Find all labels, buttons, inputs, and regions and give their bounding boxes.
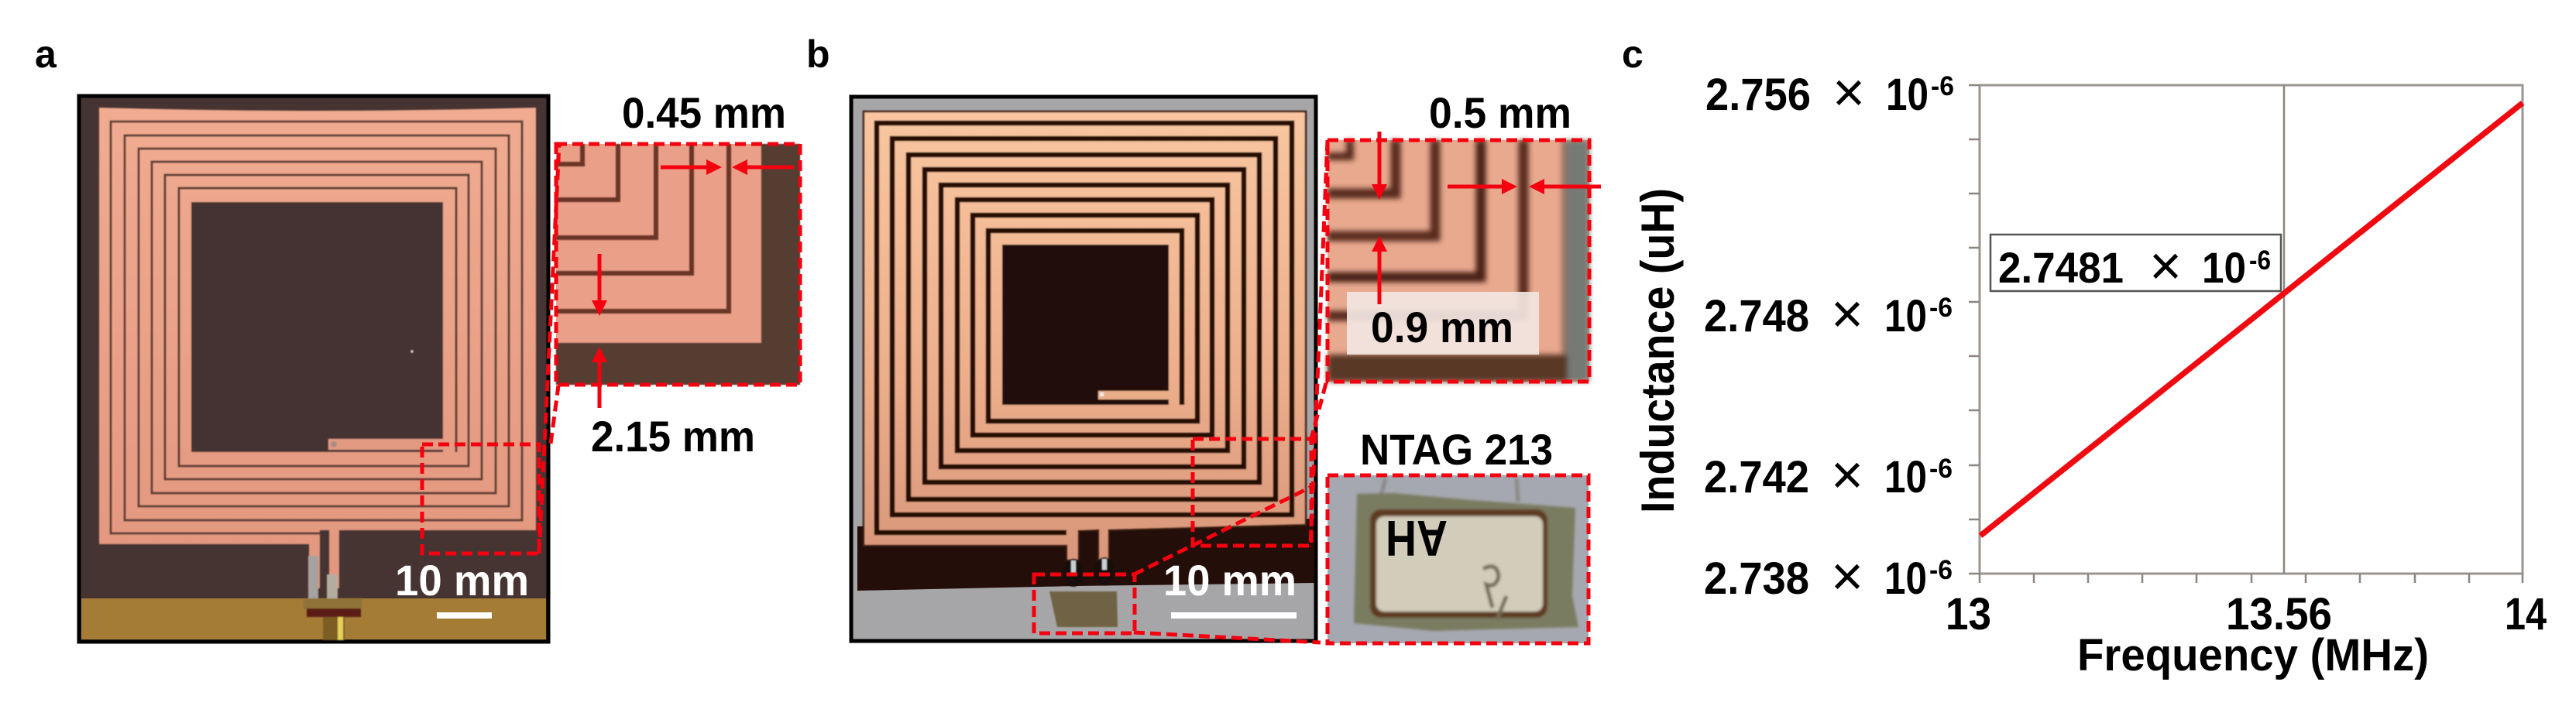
x tick labels: 13.56 [2226, 589, 2332, 639]
inset b: magnified coil corner [1327, 140, 1589, 382]
y tick label 2.742: -6 [1929, 454, 1953, 484]
y tick label 2.756: -6 [1931, 71, 1954, 101]
plot frame [1980, 85, 2523, 574]
panel label a: a [35, 33, 57, 76]
copper coil b [864, 111, 1306, 560]
dimension arrows a [592, 159, 794, 408]
x tick labels [1946, 589, 2547, 639]
y tick label 2.748: × [1831, 283, 1863, 345]
13.56 MHz marker [2283, 85, 2285, 574]
y tick label 2.738: -6 [1929, 555, 1953, 585]
axis ticks [1969, 85, 2523, 583]
inset b: NTAG 213 chip photo [1327, 475, 1589, 643]
y tick label 2.742: 2.742 [1704, 452, 1809, 502]
inductance curve [1980, 103, 2523, 536]
label 0.45 mm: 0.45 mm [622, 88, 786, 137]
zoom selection and connectors a [422, 144, 559, 553]
y tick label 2.756: 10 [1886, 70, 1929, 120]
NFC chip on coil [1049, 557, 1118, 627]
callout: value at 13.56 MHz [1990, 235, 2281, 297]
y tick label 2.742: × [1831, 444, 1863, 506]
y tick label 2.756: × [1832, 62, 1865, 124]
scale bar a: 10 mm [395, 556, 529, 605]
scale bar b: 10 mm [1163, 556, 1297, 605]
inset a: magnified coil corner [556, 144, 800, 385]
label 0.5 mm: 0.5 mm [1429, 88, 1571, 137]
panel b: photo of printed coil [851, 97, 1316, 641]
chart c: inductance vs frequency [1969, 85, 2523, 583]
y tick label 2.756 [1705, 62, 1954, 124]
label NTAG 213: NTAG 213 [1360, 425, 1553, 474]
y tick label 2.748 [1704, 283, 1953, 345]
label 2.15 mm: 2.15 mm [591, 412, 755, 461]
callout: value at 13.56 MHz: 10 [2202, 243, 2246, 292]
panel a: photo of coil antenna [79, 96, 548, 642]
wood base [81, 598, 546, 639]
dimension arrows b [1372, 132, 1601, 304]
x tick labels: 13 [1946, 589, 1991, 639]
y tick label 2.742 [1704, 444, 1953, 506]
panel label c: c [1622, 33, 1643, 76]
panel label b: b [806, 33, 830, 76]
copper coil a [99, 108, 536, 588]
y tick label 2.742: 10 [1884, 452, 1927, 502]
y tick label 2.756: 2.756 [1705, 70, 1811, 120]
y tick label 2.748: -6 [1929, 293, 1953, 323]
zoom selections and connectors b [1034, 140, 1327, 643]
y tick label 2.738 [1704, 546, 1953, 608]
SMA connector [304, 556, 362, 640]
y tick label 2.748: 10 [1884, 291, 1927, 341]
y tick label 2.748: 2.748 [1704, 291, 1809, 341]
y tick label 2.738: 10 [1884, 553, 1927, 604]
chip marking: AH [1386, 510, 1448, 567]
callout: value at 13.56 MHz: × [2149, 235, 2182, 297]
callout: value at 13.56 MHz: -6 [2249, 245, 2271, 276]
x axis title: Frequency (MHz) [2077, 630, 2429, 680]
x tick labels: 14 [2505, 589, 2547, 639]
dark substrate [857, 519, 1314, 591]
callout: value at 13.56 MHz: 2.7481 [1998, 243, 2124, 292]
y tick label 2.738: 2.738 [1704, 553, 1809, 604]
y axis title: Inductance (uH) [1632, 188, 1684, 513]
y tick label 2.738: × [1831, 546, 1863, 608]
label 0.9 mm: 0.9 mm [1371, 303, 1513, 351]
